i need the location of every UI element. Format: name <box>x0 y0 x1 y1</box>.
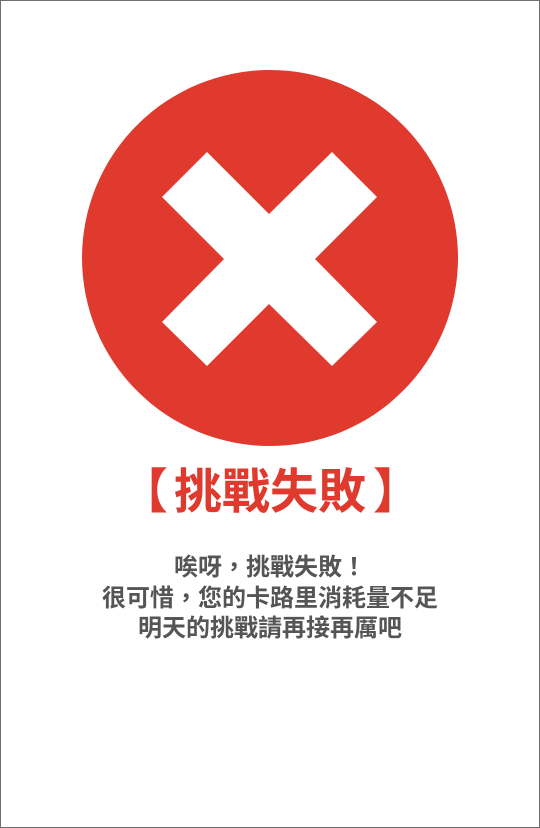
red circle <box>82 70 458 446</box>
title: 【挑戰失敗】 <box>120 466 421 519</box>
message text: 很可惜，您的卡路里消耗量不足 <box>102 584 438 612</box>
message text: 明天的挑戰請再接再厲吧 <box>138 615 402 642</box>
white cross <box>162 152 377 366</box>
icon: red circle with white cross <box>82 70 458 446</box>
message text: 唉呀，挑戰失敗！ <box>174 554 366 581</box>
message text <box>102 554 438 642</box>
